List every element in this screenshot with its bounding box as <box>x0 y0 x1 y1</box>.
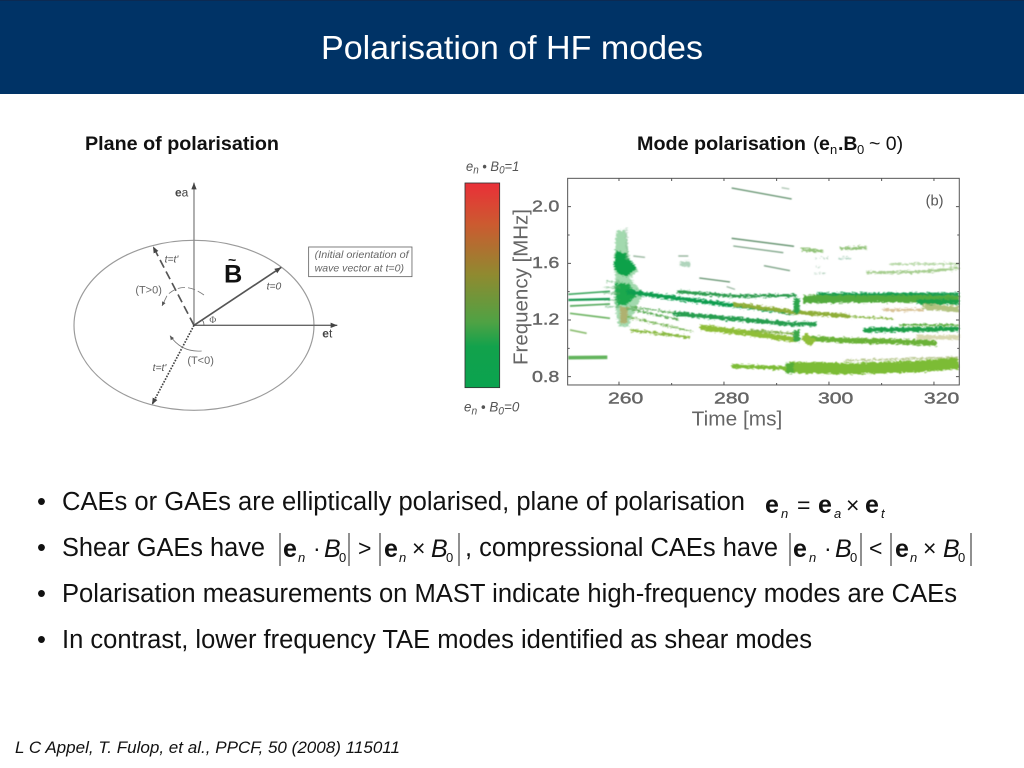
label T>0: (T>0) <box>135 284 162 296</box>
y-axis tick labels: 1.6 <box>532 255 559 272</box>
equation: compressional condition: × <box>923 535 936 561</box>
equation: compressional condition: 0 <box>850 550 857 565</box>
angle arc <box>201 320 204 325</box>
label e_a: ea <box>175 186 189 200</box>
equation: shear condition: e <box>283 535 297 563</box>
heading: mode polarisation: n <box>830 142 837 157</box>
bullet list <box>37 488 971 654</box>
bullet 1: CAEs or GAEs are elliptically polarised, plane of polarisation <box>62 488 745 516</box>
colour bar bottom label: =0 <box>504 399 520 415</box>
equation: e_n = e_a x e_t: = <box>797 492 810 518</box>
bullet 1: • <box>37 488 46 516</box>
colour bar bottom label: • B <box>477 399 498 415</box>
bullet 2: Shear GAEs have <box>62 534 265 562</box>
label upper t=t': t=t' <box>165 254 179 265</box>
equation: compressional condition: n <box>809 550 816 565</box>
chart: frequency spectrogram with colour bar <box>464 158 959 431</box>
callout: initial orientation: wave vector at t=0) <box>315 263 404 274</box>
dashed vector t=t' upper <box>153 246 194 325</box>
equation: e_n = e_a x e_t <box>765 491 886 521</box>
equation: compressional condition: · <box>824 535 832 561</box>
equation: compressional condition: n <box>910 550 917 565</box>
equation: shear condition: > <box>358 535 371 561</box>
rotation arc T<0 <box>170 336 202 351</box>
x-axis tick labels: 260 <box>608 390 643 407</box>
equation: compressional condition: 0 <box>958 550 965 565</box>
dotted vector t=t' lower <box>152 325 194 405</box>
colour bar bottom label: 0 <box>498 405 504 417</box>
equation: e_n = e_a x e_t: e <box>765 491 779 519</box>
colour bar top label: =1 <box>505 158 519 174</box>
equation: shear condition: e <box>384 535 398 563</box>
vector t=0 <box>194 267 281 325</box>
equation: compressional condition: B <box>943 535 960 563</box>
diagram: polarisation ellipse <box>74 183 412 410</box>
equation: compressional condition: B <box>835 535 852 563</box>
equation: e_n = e_a x e_t: t <box>881 506 886 521</box>
plot frame and ticks <box>568 178 959 385</box>
title banner <box>0 0 1024 94</box>
callout: initial orientation <box>309 247 412 277</box>
equation: shear condition: n <box>298 550 305 565</box>
x-axis tick labels: 280 <box>714 390 749 407</box>
heading: plane of polarisation: Plane of polarisation <box>85 133 279 155</box>
ellipse <box>74 240 314 410</box>
label B tilde: ~ <box>228 252 236 268</box>
equation: e_n = e_a x e_t: e <box>818 491 832 519</box>
equation: shear condition: B <box>324 535 341 563</box>
axis e_t <box>194 323 337 327</box>
y-axis tick labels: 0.8 <box>532 369 559 386</box>
burst at 260 ms <box>603 228 959 327</box>
x-axis title: Time [ms] <box>692 409 782 431</box>
thin high-frequency traces <box>633 188 794 289</box>
heading: mode polarisation: Mode polarisation <box>637 133 806 155</box>
colour bar bottom label: n <box>471 405 477 417</box>
y-axis title: Frequency [MHz] <box>510 209 532 365</box>
x-axis tick labels: 320 <box>924 390 959 407</box>
bullet 2: • <box>37 534 46 562</box>
equation: e_n = e_a x e_t: a <box>834 506 841 521</box>
label T<0: (T<0) <box>187 355 214 367</box>
bullet 2 <box>37 533 971 566</box>
colour bar top label: e <box>466 158 474 174</box>
panel tag (b): (b) <box>926 193 944 209</box>
equation: e_n = e_a x e_t: n <box>781 506 788 521</box>
equation: compressional condition <box>790 533 971 566</box>
heading: mode polarisation: ~ 0) <box>869 133 903 155</box>
axis e_a <box>192 183 196 325</box>
bullet 4: In contrast, lower frequency TAE modes identified as shear modes <box>62 626 812 654</box>
equation: shear condition: 0 <box>339 550 346 565</box>
label t=0: t=0 <box>267 281 282 292</box>
equation: e_n = e_a x e_t: × <box>846 492 859 518</box>
heading: mode polarisation: e <box>819 133 830 155</box>
colour bar top label: • B <box>479 158 499 174</box>
heading: mode polarisation: 0 <box>857 142 864 157</box>
equation: compressional condition: e <box>793 535 807 563</box>
bullet 3: Polarisation measurements on MAST indicate high-frequency modes are CAEs <box>62 580 957 608</box>
equation: compressional condition: e <box>895 535 909 563</box>
x-axis tick labels: 300 <box>818 390 853 407</box>
left-hand striped traces <box>568 291 610 358</box>
colour bar top label: n <box>473 165 479 177</box>
equation: shear condition <box>280 533 459 566</box>
x-axis tick labels <box>608 390 959 407</box>
bullet 3: • <box>37 580 46 608</box>
spectrogram traces <box>568 188 959 373</box>
bullet 4: • <box>37 626 46 654</box>
heading: mode polarisation: .B <box>838 133 858 155</box>
rotation arc T>0 <box>162 287 204 306</box>
equation: e_n = e_a x e_t: e <box>865 491 879 519</box>
main descending bands <box>627 292 959 373</box>
equation: shear condition: × <box>412 535 425 561</box>
y-axis tick labels: 2.0 <box>532 198 559 215</box>
colour bar bottom label: e <box>464 399 472 415</box>
y-axis tick labels <box>532 198 559 386</box>
colour bar top label: 0 <box>499 165 505 177</box>
heading: mode polarisation: ( <box>813 133 820 155</box>
equation: shear condition: · <box>313 535 321 561</box>
label lower t=t': t=t' <box>153 363 167 374</box>
equation: shear condition: 0 <box>446 550 453 565</box>
y-axis tick labels: 1.2 <box>532 312 559 329</box>
citation: L C Appel, T. Fulop, et al., PPCF, 50 (2008) 115011 <box>15 739 400 757</box>
equation: shear condition: n <box>399 550 406 565</box>
title: Polarisation of HF modes <box>321 29 703 66</box>
bullet 1 <box>37 488 886 521</box>
label phi: Φ <box>209 316 216 326</box>
colour bar <box>464 158 520 417</box>
equation: compressional condition: < <box>869 535 882 561</box>
label B tilde: B <box>224 261 242 289</box>
equation: shear condition: B <box>431 535 448 563</box>
callout: initial orientation: (Initial orientation of <box>315 250 410 261</box>
heading: mode polarisation <box>637 133 903 157</box>
label e_t: et <box>322 327 333 341</box>
bullet 2: , compressional CAEs have <box>465 534 778 562</box>
